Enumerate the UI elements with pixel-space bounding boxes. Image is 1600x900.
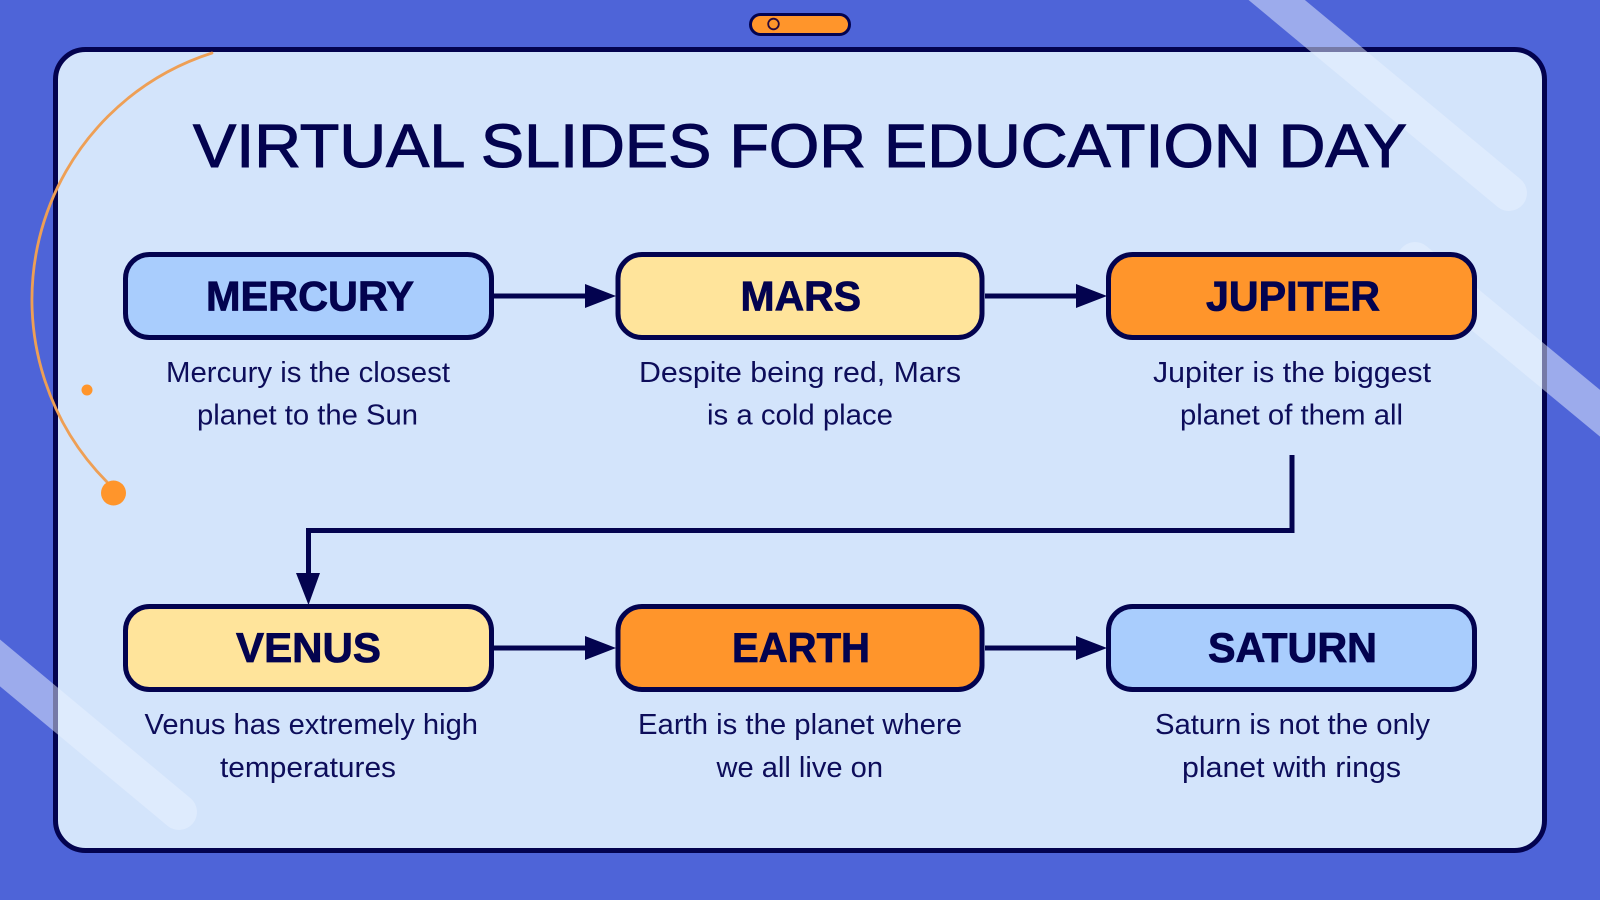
node: Mars: Despite being red, Mars [639, 357, 961, 389]
node: Saturn [1108, 606, 1474, 784]
node: Mars: is a cold place [707, 400, 893, 432]
node: Venus: temperatures [220, 752, 396, 784]
orange arc decoration [32, 53, 212, 506]
node: Earth: EARTH [732, 624, 870, 671]
node: Saturn: planet with rings [1182, 752, 1401, 784]
node: Mars [618, 254, 982, 432]
node: Earth [618, 606, 982, 784]
node: Mercury: MERCURY [206, 272, 414, 320]
node: Mercury [126, 254, 492, 432]
node: Saturn: SATURN [1208, 624, 1377, 671]
node: Earth: we all live on [715, 752, 883, 784]
node: Venus: Venus has extremely high [144, 709, 478, 741]
node: Mercury: planet to the Sun [197, 400, 418, 432]
node: Jupiter: Jupiter is the biggest [1153, 357, 1431, 389]
camera pill [750, 14, 850, 34]
node: Venus: VENUS [236, 624, 381, 671]
arrow: Earth to Saturn [985, 636, 1107, 660]
node: Jupiter [1108, 254, 1474, 432]
node: Venus [126, 606, 492, 784]
arrow: Jupiter to Venus connector [296, 455, 1292, 605]
node: Earth: Earth is the planet where [638, 709, 962, 741]
node: Jupiter: planet of them all [1180, 400, 1403, 432]
node: Jupiter: JUPITER [1206, 272, 1380, 320]
arrow: Mars to Jupiter [985, 284, 1107, 308]
title: VIRTUAL SLIDES FOR EDUCATION DAY [193, 112, 1407, 180]
arrow: Venus to Earth [493, 636, 616, 660]
node: Saturn: Saturn is not the only [1155, 709, 1430, 741]
node: Mercury: Mercury is the closest [166, 357, 450, 389]
node: Mars: MARS [740, 272, 861, 320]
arrow: Mercury to Mars [493, 284, 616, 308]
